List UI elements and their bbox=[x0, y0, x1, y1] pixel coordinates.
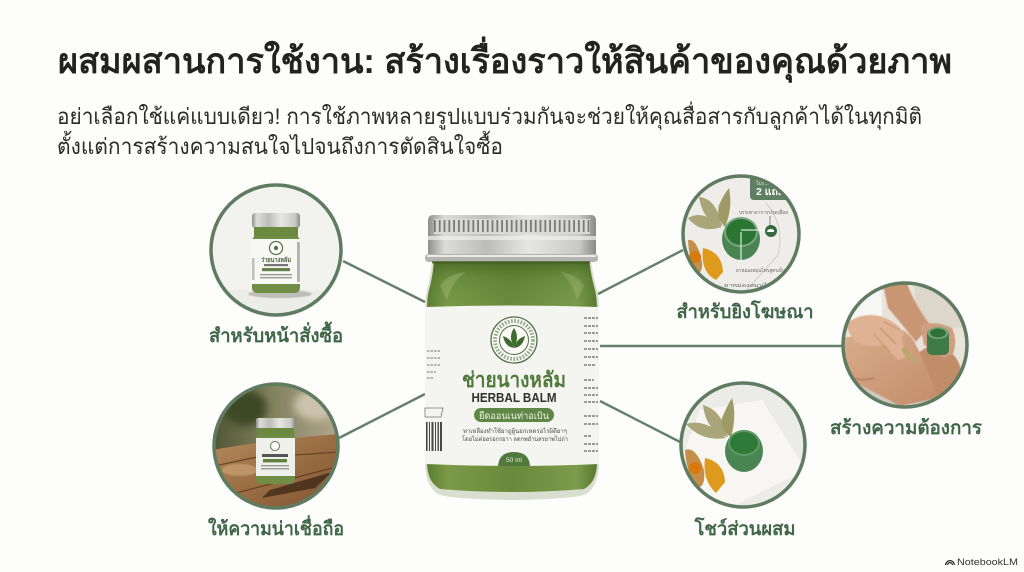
callout badge: 2 แถม bbox=[756, 186, 785, 198]
caption: ingredients: โชว์ส่วนผสม bbox=[694, 517, 796, 540]
mini jar bbox=[256, 418, 295, 484]
label logo bbox=[491, 317, 537, 363]
callout badge: โปรโมชั่น bbox=[756, 180, 778, 187]
subtitle text block: ตั้งแต่การสร้างความสนใจไปจนถึงการตัดสินใจซื้อ bbox=[57, 131, 503, 159]
circle: ingredients bbox=[681, 383, 806, 507]
circle: desire lifestyle bbox=[838, 280, 970, 410]
label description: ทาเหลืองทำใช้ยาถูผู้นอกเหตรอไรผิดียาๆ bbox=[463, 427, 567, 435]
caption: order page: สำหรับหน้าสั่งซื้อ bbox=[209, 321, 343, 347]
cream smear bbox=[904, 350, 914, 361]
turmeric bbox=[688, 240, 723, 280]
hand holding pot bbox=[920, 323, 955, 358]
label barcode bbox=[425, 408, 443, 451]
label description: โดยไม่ต่ออรอกรยาา ลดกพยำนลรยาพไปถ่า bbox=[462, 435, 568, 443]
caption: ads: สำหรับยิงโฆษณา bbox=[676, 300, 814, 323]
callout icon bbox=[741, 216, 777, 262]
caption: desire: สร้างความต้องการ bbox=[830, 417, 983, 439]
subtitle text block bbox=[57, 101, 922, 159]
callout notes: ยาหม่องสมุนไพร bbox=[724, 282, 776, 289]
balm pot in hand bbox=[927, 327, 949, 355]
circle: outdoor trust jar bbox=[212, 383, 340, 510]
callout notes: ยาหม่องสมุนไพรสูตรเย็น bbox=[736, 266, 786, 274]
jar label bbox=[425, 306, 599, 466]
bay leaves bbox=[686, 398, 734, 439]
label product name: ช่ายนางหลัม bbox=[462, 369, 566, 392]
far leg bbox=[919, 346, 961, 396]
subtitle text block: อย่าเลือกใช้แค่แบบเดียว! การใช้ภาพหลายรูปแบบร่วมกันจะช่วยให้คุณสื่อสารกับลูกค้าได้ในทุกมิติ bbox=[57, 101, 922, 130]
bay leaves bbox=[688, 188, 730, 229]
caption: outdoor trust: ให้ความน่าเชื่อถือ bbox=[208, 515, 344, 540]
forearm from above bbox=[883, 284, 929, 342]
callout notes: บรรเทาอาการปวดเมื่อย bbox=[739, 209, 788, 216]
circle: order page jar bbox=[210, 184, 342, 316]
jar body bbox=[425, 260, 599, 500]
connector lines bbox=[339, 250, 843, 443]
title: ผสมผสานการใช้งาน: สร้างเรื่องราวให้สินค้าของคุณด้วยภาพ bbox=[58, 36, 952, 83]
label small text right bbox=[584, 318, 598, 451]
jar lid bbox=[425, 215, 598, 264]
balm pot bbox=[722, 217, 760, 260]
circle: ad creative bbox=[682, 175, 800, 293]
label size badge bbox=[498, 452, 530, 466]
main product jar bbox=[425, 215, 599, 500]
balm pot bbox=[725, 430, 763, 472]
hand on knee bbox=[846, 315, 905, 360]
callout badge bbox=[750, 178, 786, 200]
label description bbox=[462, 427, 568, 443]
watermark: NotebookLM: NotebookLM bbox=[957, 557, 1018, 568]
callout notes bbox=[724, 209, 788, 289]
near leg with knee bbox=[844, 330, 936, 406]
mini jar: ว่ายนางหลัม bbox=[261, 256, 291, 264]
label small text left bbox=[427, 351, 441, 378]
label size badge: 50 ml bbox=[506, 457, 522, 464]
label pill: ยืดออนเนท่าอเบิน bbox=[479, 411, 549, 422]
turmeric bbox=[685, 449, 725, 493]
label english name: HERBAL BALM bbox=[472, 391, 556, 405]
